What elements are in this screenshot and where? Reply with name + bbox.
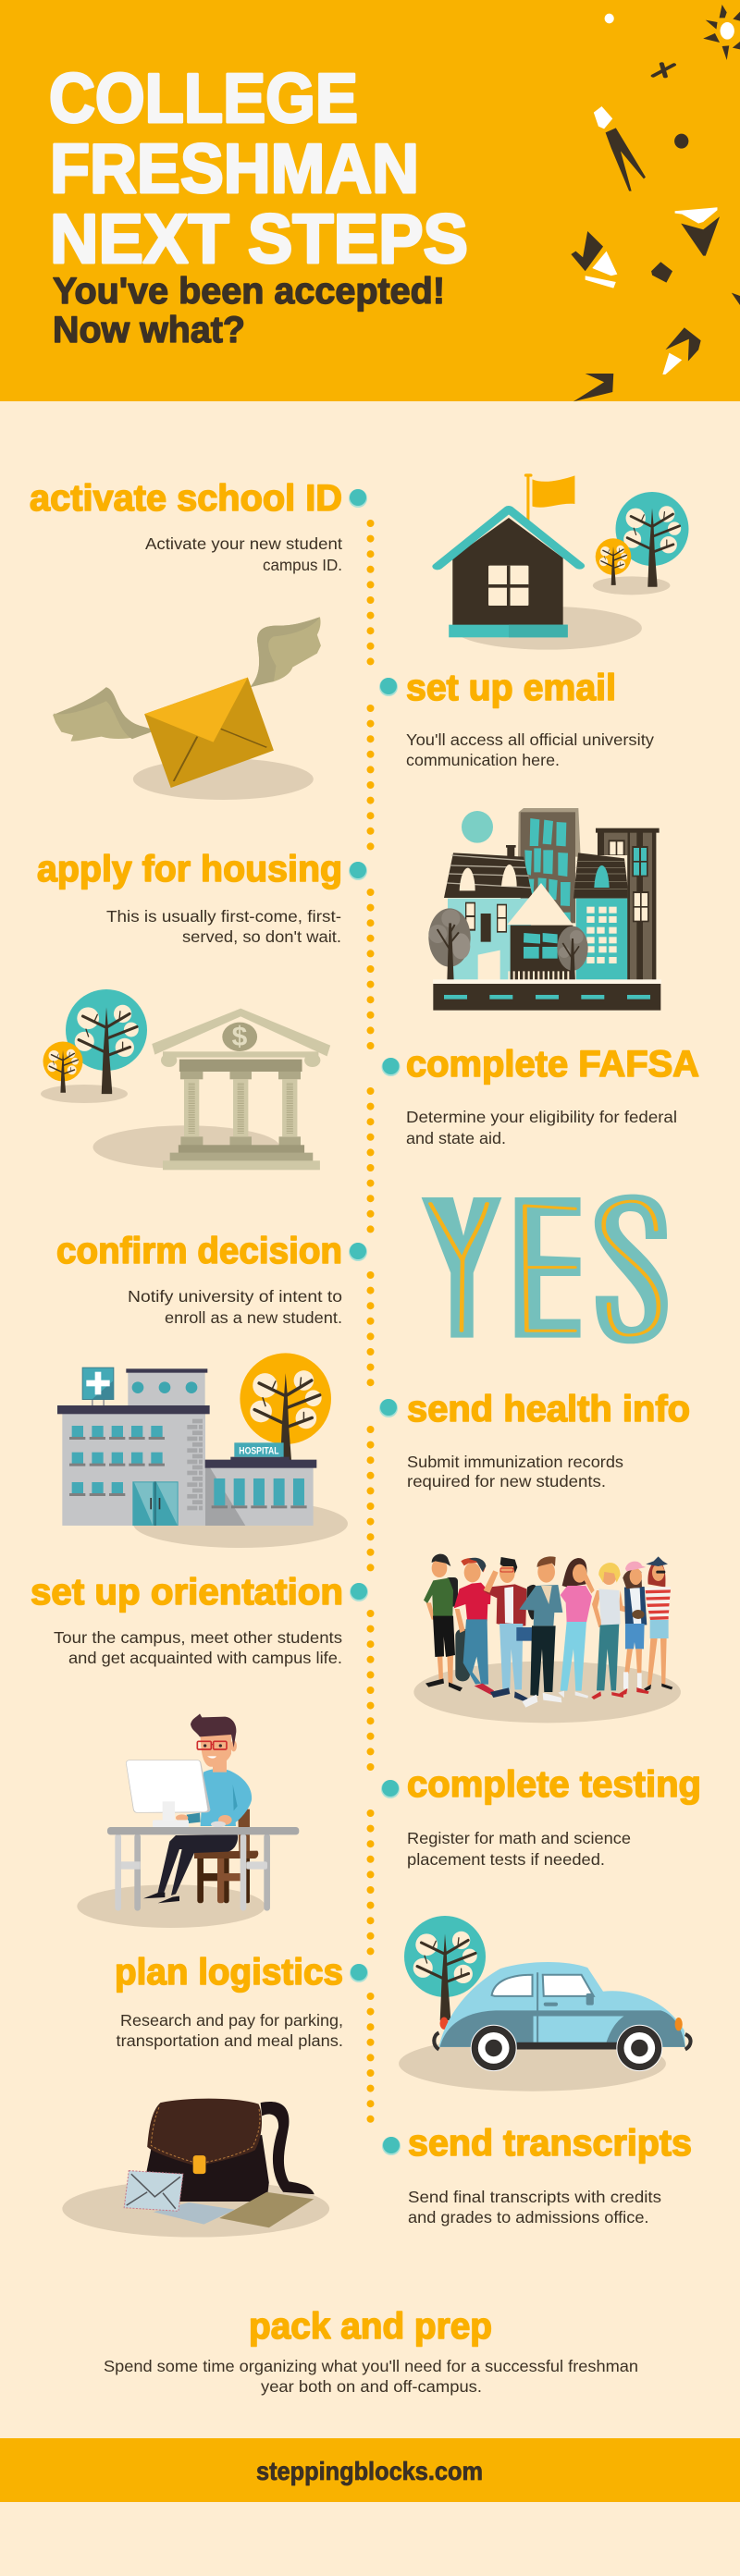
step: activate school ID: [30, 478, 367, 574]
icon: messenger bag with envelopes: [62, 2099, 329, 2238]
description: [54, 1628, 342, 1667]
description: [117, 2011, 343, 2050]
marker: [379, 678, 398, 696]
description: [104, 2357, 638, 2396]
description: and grades to admissions office.: [408, 2208, 649, 2226]
step: set up email: [379, 668, 654, 769]
description: year both on and off-campus.: [261, 2377, 482, 2396]
icon: car with tree: [399, 1916, 691, 2091]
marker: [349, 1243, 367, 1261]
description: Spend some time organizing what you'll need for a successful freshman: [104, 2357, 638, 2375]
subtitle: Now what?: [53, 310, 245, 350]
step: send health info: [379, 1389, 690, 1490]
description: Determine your eligibility for federal: [406, 1108, 677, 1126]
icon: bank building: $: [232, 1022, 248, 1052]
panel: header: [0, 0, 740, 401]
description: enroll as a new student.: [165, 1308, 342, 1327]
marker: [349, 862, 367, 880]
icon: hospital: [57, 1353, 348, 1548]
title: COLLEGE: [49, 59, 358, 137]
title: FRESHMAN: [50, 129, 419, 207]
description: [406, 1108, 677, 1147]
description: [407, 1453, 623, 1490]
description: served, so don't wait.: [182, 927, 341, 946]
icon: hospital: HOSPITAL: [239, 1446, 279, 1457]
description: You'll access all official university: [406, 730, 654, 749]
heading: plan logistics: [115, 1952, 343, 1993]
heading: complete testing: [407, 1764, 701, 1805]
description: [128, 1287, 342, 1327]
description: Submit immunization records: [407, 1453, 623, 1471]
description: campus ID.: [263, 556, 342, 574]
student 2: [454, 1558, 494, 1695]
description: and get acquainted with campus life.: [68, 1649, 342, 1667]
description: This is usually first-come, first-: [106, 907, 341, 926]
step: set up orientation: [31, 1572, 368, 1667]
student 8: [644, 1556, 672, 1691]
description: Research and pay for parking,: [120, 2011, 343, 2030]
description: Send final transcripts with credits: [408, 2188, 661, 2206]
footer website: steppingblocks.com: [256, 2457, 483, 2485]
description: Notify university of intent to: [128, 1287, 342, 1306]
heading: send health info: [407, 1389, 690, 1429]
student 1: [424, 1554, 462, 1691]
marker: [382, 2137, 401, 2155]
step: confirm decision: [56, 1231, 367, 1327]
description: placement tests if needed.: [407, 1850, 605, 1869]
description: [406, 730, 654, 769]
subtitle: [53, 271, 445, 350]
student 3: [483, 1557, 528, 1702]
icon: campus housing street: [428, 808, 661, 1011]
step: send transcripts: [382, 2123, 692, 2226]
icon: group of students: [413, 1554, 681, 1723]
icon: winged envelope: [53, 617, 321, 800]
heading: apply for housing: [37, 849, 342, 889]
student 5: [558, 1558, 595, 1699]
description: transportation and meal plans.: [117, 2031, 343, 2050]
description: [106, 907, 341, 946]
heading: confirm decision: [56, 1231, 342, 1271]
step: apply for housing: [37, 849, 367, 946]
subtitle: You've been accepted!: [53, 271, 445, 312]
description: Tour the campus, meet other students: [54, 1628, 342, 1647]
student 4: [516, 1556, 562, 1708]
marker: [381, 1058, 400, 1076]
description: [408, 2188, 661, 2226]
marker: [349, 489, 367, 508]
icon: bank building: [93, 1009, 330, 1170]
icon: trees beside bank: [41, 989, 330, 1170]
description: Register for math and science: [407, 1829, 631, 1847]
heading: set up email: [406, 668, 616, 708]
step: plan logistics: [115, 1952, 368, 2050]
description: communication here.: [406, 751, 560, 769]
heading: send transcripts: [408, 2123, 692, 2164]
step: complete testing: [381, 1764, 701, 1869]
icon: student at computer desk: [77, 1713, 299, 1928]
description: Activate your new student: [145, 534, 342, 553]
icon: school house with flag and trees: [438, 473, 688, 650]
step: complete FAFSA: [381, 1044, 699, 1147]
dotted timeline: [366, 523, 374, 2119]
title: [49, 59, 468, 277]
title: NEXT STEPS: [50, 200, 468, 277]
description: and state aid.: [406, 1129, 506, 1147]
description: [407, 1829, 631, 1869]
icon: scattered decorative shapes: [571, 5, 740, 401]
icon: YES lettering: [422, 1195, 668, 1343]
panel: footer: [0, 2438, 740, 2502]
marker: [379, 1399, 398, 1417]
student 7: [619, 1562, 649, 1695]
heading: activate school ID: [30, 478, 342, 519]
marker: [350, 1583, 368, 1601]
heading: set up orientation: [31, 1572, 343, 1613]
heading: complete FAFSA: [406, 1044, 699, 1085]
student 6: [591, 1563, 635, 1699]
description: [145, 534, 342, 574]
marker: [381, 1780, 400, 1798]
step: pack and prep: [104, 2306, 638, 2396]
marker: [350, 1964, 368, 1982]
heading: pack and prep: [249, 2306, 492, 2347]
description: required for new students.: [407, 1472, 606, 1490]
